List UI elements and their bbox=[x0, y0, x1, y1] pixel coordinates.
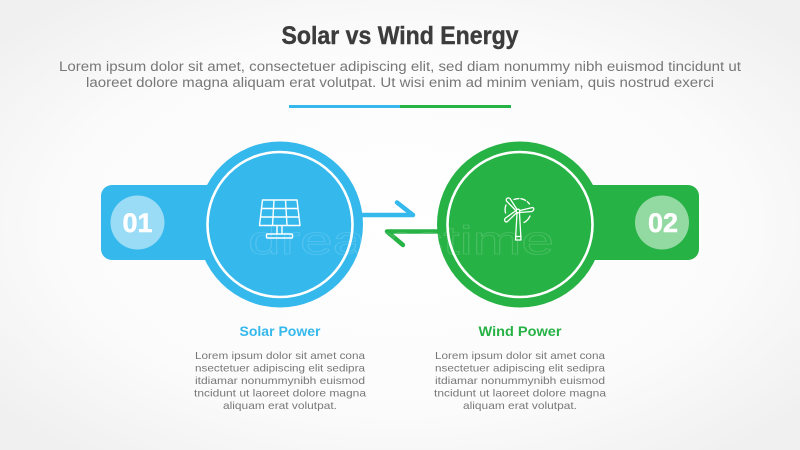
text: solar description: aliquam erat volutpat. bbox=[223, 400, 337, 412]
text: wind description: nsectetuer adipiscing elit sedipra bbox=[435, 362, 605, 374]
icon: wind turbine bbox=[505, 198, 534, 240]
arrow: wind to solar bbox=[387, 232, 440, 245]
text: solar description: Lorem ipsum dolor sit amet cona bbox=[195, 350, 365, 362]
text: wind description: Lorem ipsum dolor sit amet cona bbox=[435, 350, 605, 362]
badge 01: 01 bbox=[122, 208, 153, 238]
arrow: solar to wind bbox=[360, 202, 413, 215]
panel: wind bbox=[437, 142, 699, 308]
badge 02 bbox=[635, 196, 689, 250]
icon: solar panel bbox=[260, 200, 300, 238]
label: wind power: Wind Power bbox=[478, 323, 562, 339]
text: solar description: nsectetuer adipiscing elit sedipra bbox=[195, 362, 365, 374]
wind circle bbox=[437, 142, 603, 308]
solar circle bbox=[197, 142, 363, 308]
watermark: dreamstime bbox=[248, 219, 554, 263]
text: solar description: tncidunt ut laoreet dolore magna bbox=[194, 388, 366, 400]
intro text: laoreet dolore magna aliquam erat volutpat. Ut wisi enim ad minim veniam, quis nostrud exerci bbox=[86, 75, 714, 90]
text: solar description: itdiamar nonummynibh euismod bbox=[195, 375, 365, 387]
text: wind description bbox=[434, 350, 606, 412]
wind number tab bbox=[549, 185, 699, 260]
intro text: Lorem ipsum dolor sit amet, consectetuer adipiscing elit, sed diam nonummy nibh euismod tincidunt ut bbox=[59, 59, 741, 74]
title underline bbox=[289, 105, 511, 108]
text: wind description: itdiamar nonummynibh euismod bbox=[435, 375, 605, 387]
text: wind description: tncidunt ut laoreet dolore magna bbox=[434, 388, 606, 400]
title: Solar vs Wind Energy bbox=[282, 22, 519, 50]
intro text bbox=[59, 59, 741, 90]
badge 02: 02 bbox=[648, 208, 678, 238]
text: solar description bbox=[194, 350, 366, 412]
panel: solar bbox=[101, 142, 363, 308]
solar number tab bbox=[101, 185, 251, 260]
label: solar power: Solar Power bbox=[240, 323, 321, 339]
text: wind description: aliquam erat volutpat. bbox=[463, 400, 577, 412]
badge 01 bbox=[110, 196, 164, 250]
